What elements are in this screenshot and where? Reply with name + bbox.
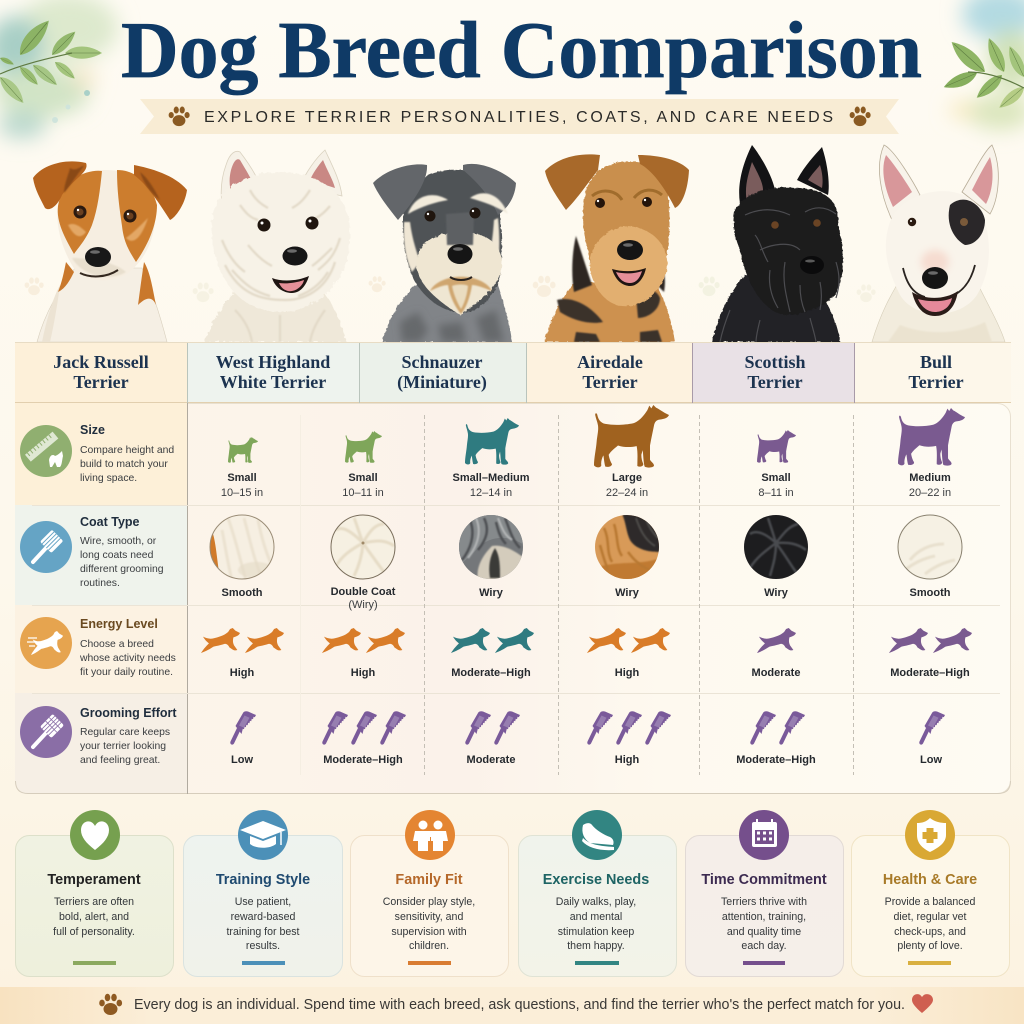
size: Bull: Medium (909, 472, 951, 484)
portrait: Airedale Terrier (544, 154, 689, 342)
accent bar (242, 961, 285, 965)
icon: paw left (169, 107, 190, 126)
description: supervision with (391, 926, 467, 938)
size values (221, 405, 965, 499)
row description: Energy Level: Choose a breed (80, 639, 154, 650)
size: Schnauzer: 12–14 in (470, 487, 512, 499)
row description: Grooming Effort (80, 727, 170, 766)
coat: Bull smooth (897, 514, 963, 599)
coat: Jack Russell smooth: Smooth (222, 587, 263, 599)
header: West Highland White Terrier: West Highland (216, 352, 330, 372)
accent bar (73, 961, 116, 965)
size: West Highland: Small (348, 472, 378, 484)
header: Bull Terrier: Terrier (908, 372, 964, 392)
header: West Highland White Terrier (187, 343, 359, 403)
icon: ruler and dog (20, 425, 72, 477)
description: results. (246, 940, 280, 952)
portrait: Scottish Terrier (712, 145, 843, 342)
subtitle text: EXPLORE TERRIER PERSONALITIES, COATS, AND CARE NEEDS (204, 109, 833, 126)
row description: Size: build to match your (80, 459, 168, 470)
description: and mental (570, 911, 622, 923)
row description: Coat Type: long coats need (80, 550, 154, 561)
heading: Exercise Needs (543, 872, 649, 888)
heading: Health & Care (883, 872, 977, 888)
row description: Coat Type: routines. (80, 578, 120, 589)
table header row (15, 342, 1011, 403)
energy level values (201, 628, 972, 679)
description: children. (409, 940, 449, 952)
grooming: Scottish: Moderate–High (736, 754, 816, 766)
coat: Schnauzer wiry: Wiry (479, 587, 504, 599)
energy: Airedale: High (615, 667, 639, 679)
icon: heart (912, 994, 933, 1013)
footer band (0, 987, 1024, 1024)
row description: Size: Compare height and (80, 445, 174, 456)
header: West Highland White Terrier: White Terrier (220, 372, 326, 392)
energy: West Highland (322, 628, 405, 679)
header: Schnauzer (Miniature) (359, 343, 526, 403)
coat: Schnauzer wiry (458, 514, 524, 599)
icon: paw (99, 994, 122, 1015)
row description: Coat Type: Wire, smooth, or (80, 536, 157, 547)
row description: Energy Level (79, 639, 176, 678)
size: Scottish: 8–11 in (758, 487, 794, 499)
icon: running dog (20, 617, 72, 669)
description: check-ups, and (894, 926, 966, 938)
watercolor foliage: top left (0, 0, 118, 139)
row: Energy Level (20, 617, 176, 678)
energy: Bull (889, 628, 972, 679)
description (226, 896, 300, 952)
header: Airedale Terrier: Airedale (577, 352, 643, 372)
heading: Time Commitment (701, 872, 827, 888)
row description: Energy Level: whose activity needs (79, 653, 176, 664)
coat: Scottish wiry (743, 514, 809, 599)
description: each day. (741, 940, 787, 952)
size: Schnauzer: Small–Medium (452, 472, 530, 484)
portrait: Bull Terrier (872, 145, 1005, 342)
description: Use patient, (235, 896, 291, 908)
header: Scottish Terrier: Scottish (744, 352, 806, 372)
portrait: Jack Russell Terrier (33, 161, 187, 342)
row: Size (20, 423, 174, 484)
row description: Size (80, 445, 174, 484)
icon: calendar (739, 810, 789, 860)
header: Schnauzer (Miniature): Schnauzer (402, 352, 483, 372)
description (885, 896, 975, 952)
size: West Highland: 10–11 in (342, 487, 384, 499)
header: Airedale Terrier (526, 343, 692, 403)
icon: paw right (850, 107, 871, 126)
header: Jack Russell Terrier: Jack Russell (53, 352, 149, 372)
description: bold, alert, and (59, 911, 129, 923)
accent bar (908, 961, 951, 965)
description (556, 896, 636, 952)
row title: Size: Size (80, 423, 105, 437)
energy: Schnauzer: Moderate–High (451, 667, 531, 679)
energy: Airedale (587, 628, 670, 679)
title: Dog Breed Comparison (121, 7, 922, 95)
grooming: Scottish (736, 711, 816, 766)
coat: Airedale wiry: Wiry (615, 587, 640, 599)
coat: West Highland double coat: Double Coat (331, 586, 396, 598)
watercolor foliage: top right (942, 0, 1024, 130)
icon: sneaker (572, 810, 622, 860)
portrait: Miniature Schnauzer (373, 164, 516, 342)
size: Airedale (594, 405, 669, 499)
energy: Scottish: Moderate (752, 667, 800, 679)
energy: Bull: Moderate–High (890, 667, 970, 679)
size: Bull (898, 408, 965, 499)
row description: Energy Level: fit your daily routine. (80, 667, 173, 678)
description (383, 896, 475, 952)
description: stimulation keep (558, 926, 634, 938)
portrait: West Highland White Terrier (205, 150, 350, 342)
card: Health & Care (852, 810, 1010, 976)
icon: brush (20, 521, 72, 573)
grooming: Airedale: High (615, 754, 639, 766)
energy: Jack Russell (201, 628, 284, 679)
header: Scottish Terrier (692, 343, 854, 403)
description: full of personality. (53, 926, 135, 938)
row description: Grooming Effort: your terrier looking (80, 741, 166, 752)
card: Family Fit (350, 810, 508, 976)
footer message: Every dog is an individual. Spend time with each breed, ask questions, and find the terrier who's the perfect match for you. (134, 997, 905, 1013)
description: plenty of love. (897, 940, 963, 952)
dog portraits (33, 145, 1005, 342)
faint paw prints behind dogs (25, 276, 876, 302)
grooming: Bull: Low (920, 754, 942, 766)
heading: Training Style (216, 872, 310, 888)
description: attention, training, (722, 911, 806, 923)
row title: Energy Level: Energy Level (80, 617, 158, 631)
icon: two children (405, 810, 455, 860)
heading: Family Fit (395, 872, 463, 888)
size: Scottish: Small (761, 472, 791, 484)
header: Jack Russell Terrier: Terrier (73, 372, 129, 392)
coat: Scottish wiry: Wiry (764, 587, 789, 599)
grooming: West Highland (322, 711, 406, 766)
header: Bull Terrier: Bull (920, 352, 952, 372)
row description: Grooming Effort: and feeling great. (80, 755, 160, 766)
heading: Temperament (47, 872, 141, 888)
coat: Bull smooth: Smooth (910, 587, 951, 599)
card: Temperament (16, 810, 174, 976)
size: Scottish (757, 430, 796, 499)
energy: West Highland: High (351, 667, 375, 679)
grooming effort values (230, 711, 945, 766)
energy: Jack Russell: High (230, 667, 254, 679)
accent bar (743, 961, 785, 965)
subtitle ribbon (140, 99, 899, 134)
row: Coat Type (20, 515, 164, 589)
grooming: Jack Russell: Low (231, 754, 253, 766)
icon: graduation cap (238, 810, 288, 860)
accent bar (408, 961, 451, 965)
size: Jack Russell (221, 437, 263, 499)
row description: Coat Type: different grooming (80, 564, 164, 575)
row description: Size: living space. (80, 473, 137, 484)
header: Jack Russell Terrier (15, 343, 187, 403)
description: diet, regular vet (893, 911, 967, 923)
grooming: Airedale (587, 711, 671, 766)
row description: Grooming Effort: Regular care keeps (80, 727, 170, 738)
row: Grooming Effort (20, 706, 177, 766)
comparison table (15, 403, 1010, 794)
icon: shield with cross (905, 810, 955, 860)
size: Jack Russell: 10–15 in (221, 487, 263, 499)
description: Consider play style, (383, 896, 475, 908)
coat: Airedale wiry (594, 514, 660, 599)
size: Schnauzer (452, 418, 530, 499)
size: West Highland (342, 431, 384, 499)
description (53, 896, 135, 938)
coat: West Highland double coat (330, 514, 396, 611)
grooming: Jack Russell (230, 711, 256, 766)
grooming: Bull (919, 711, 945, 766)
icon: comb (20, 706, 72, 758)
header: Scottish Terrier: Terrier (747, 372, 803, 392)
grooming: Schnauzer: Moderate (467, 754, 515, 766)
size: Airedale: 22–24 in (606, 487, 648, 499)
grooming: Schnauzer (465, 711, 520, 766)
description: reward-based (231, 911, 295, 923)
description: sensitivity, and (395, 911, 463, 923)
row title: Coat Type: Coat Type (80, 515, 140, 529)
description: and quality time (727, 926, 801, 938)
size: Jack Russell: Small (227, 472, 257, 484)
description: Provide a balanced (885, 896, 975, 908)
card: Time Commitment (686, 810, 844, 976)
size: Bull: 20–22 in (909, 487, 951, 499)
energy: Schnauzer (451, 628, 534, 679)
row description: Coat Type (80, 536, 164, 589)
header: Schnauzer (Miniature): (Miniature) (397, 372, 487, 393)
description (721, 896, 807, 952)
coat: Jack Russell smooth (209, 514, 275, 599)
header: Airedale Terrier: Terrier (582, 372, 638, 392)
header: Bull Terrier (854, 343, 1011, 403)
energy: Scottish (752, 628, 800, 679)
grooming: West Highland: Moderate–High (323, 754, 403, 766)
coat: West Highland double coat: (Wiry) (348, 599, 378, 611)
accent bar (575, 961, 619, 965)
description: Daily walks, play, (556, 896, 636, 908)
description: training for best (226, 926, 300, 938)
description: Terriers thrive with (721, 896, 807, 908)
size: Airedale: Large (612, 472, 642, 484)
card: Training Style (184, 810, 342, 976)
coat type values (209, 514, 963, 611)
description: Terriers are often (54, 896, 134, 908)
row title: Grooming Effort: Grooming Effort (80, 706, 177, 720)
description: them happy. (567, 940, 625, 952)
card: Exercise Needs (518, 810, 676, 976)
icon: heart (70, 810, 120, 860)
